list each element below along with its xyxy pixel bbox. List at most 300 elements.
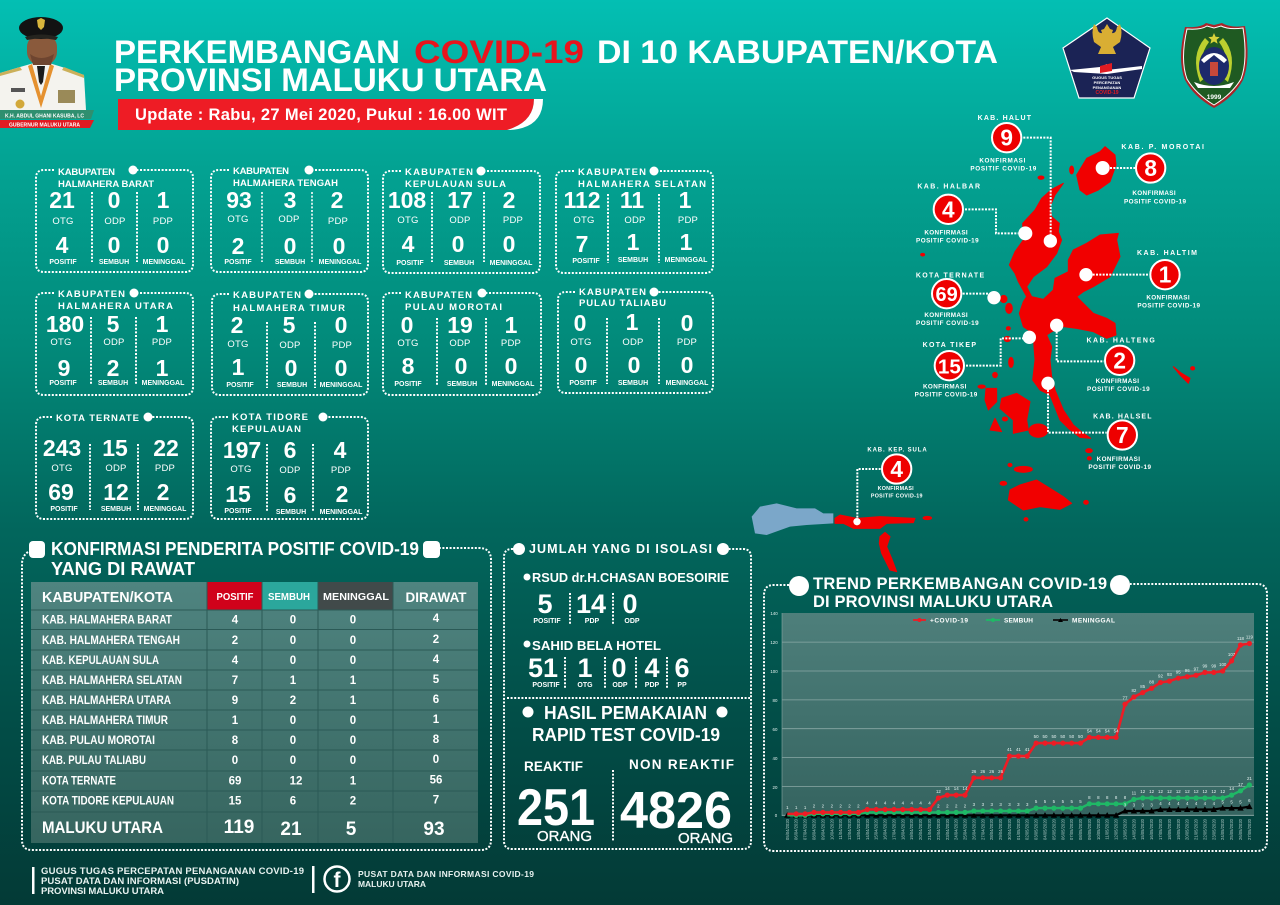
x axis dates: 03/05/2020 xyxy=(1034,818,1039,840)
callout: kab. halteng xyxy=(1050,319,1155,393)
callout: kota ternate: KOTA TERNATE xyxy=(916,273,984,280)
callout: kab. halut: 9 xyxy=(1000,125,1013,151)
table: SEMBUH xyxy=(268,591,310,603)
table: 5 xyxy=(433,674,440,686)
x axis dates: 15/04/2020 xyxy=(874,818,879,840)
x axis dates: 15/05/2020 xyxy=(1140,818,1145,840)
table: 9 xyxy=(232,695,238,707)
x axis dates: 23/05/2020 xyxy=(1211,818,1216,840)
data labels: positif: 77 xyxy=(1123,696,1128,700)
data labels: sembuh: 2 xyxy=(955,804,958,808)
logo: gugus tugas xyxy=(1063,18,1150,98)
heading: hasil rapid test: RAPID TEST COVID-19 xyxy=(532,725,720,745)
x axis dates: 14/04/2020 xyxy=(865,818,870,840)
x axis dates: 17/04/2020 xyxy=(892,818,896,840)
y axis labels: 60 xyxy=(773,727,778,732)
x axis dates: 20/05/2020 xyxy=(1185,818,1190,840)
data labels: sembuh: 5 xyxy=(1062,799,1065,804)
data labels: meninggal: 4 xyxy=(1168,801,1171,806)
panel: halmahera barat: ODP xyxy=(104,216,126,227)
panel: halmahera barat: 0 xyxy=(157,232,169,258)
stats: sahid bela hotel: 51 xyxy=(528,653,558,683)
data labels: positif: 26 xyxy=(998,769,1004,774)
table: 2 xyxy=(290,695,296,707)
panel: halmahera barat: 4 xyxy=(56,232,69,258)
callout: kab. p. morotai xyxy=(1096,144,1204,205)
x axis dates: 12/05/2020 xyxy=(1114,818,1119,840)
data labels: positif: 26 xyxy=(980,769,986,774)
stats: rsud chasan boesoirie: 14 xyxy=(576,589,606,619)
data labels: positif: 50 xyxy=(1069,734,1075,739)
table: 21 xyxy=(280,819,302,840)
callout: kab. p. morotai: POSITIF COVID-19 xyxy=(1124,198,1186,205)
data labels: positif: 4 xyxy=(919,800,922,806)
data labels: sembuh xyxy=(937,776,1252,808)
panel: konfirmasi penderita positif xyxy=(22,538,491,850)
stats: sahid bela hotel: PDP xyxy=(645,682,660,689)
panel: pulau morotai: PDP xyxy=(501,338,521,349)
table: KAB. HALMAHERA BARAT xyxy=(42,614,172,626)
panel: halmahera tengah xyxy=(211,166,368,272)
footer: facebook credit: MALUKU UTARA xyxy=(358,879,426,889)
data labels: positif: 118 xyxy=(1237,636,1245,641)
callout: kota tikep: KOTA TIKEP xyxy=(923,342,976,349)
logo: provinsi maluku utara: 1999 xyxy=(1207,94,1222,101)
table: 119 xyxy=(224,817,254,838)
data labels: sembuh: 5 xyxy=(1079,799,1082,804)
panel: kota tidore kepulauan: PDP xyxy=(331,465,351,476)
data labels: meninggal: 4 xyxy=(1186,801,1189,806)
stat: reaktif: ORANG xyxy=(537,828,592,845)
x axis dates: 19/04/2020 xyxy=(909,818,914,840)
logo: gugus tugas: COVID-19 xyxy=(1095,90,1119,96)
callout: kab. haltim: KONFIRMASI xyxy=(1146,295,1190,302)
data labels: positif: 26 xyxy=(989,769,995,774)
x axis dates: 10/04/2020 xyxy=(829,818,834,840)
panel: halmahera utara: 1 xyxy=(156,355,169,381)
panel: pulau morotai: 1 xyxy=(505,312,518,338)
y axis labels: 140 xyxy=(770,611,778,616)
callout: kab. kep. sula: KONFIRMASI xyxy=(878,486,914,492)
data labels: sembuh: 2 xyxy=(946,804,949,808)
panel: halmahera tengah: OTG xyxy=(227,214,249,225)
data labels: positif: 99 xyxy=(1211,664,1217,668)
panel: kota tidore kepulauan: 4 xyxy=(334,437,347,463)
map: red islands xyxy=(835,147,1195,572)
panel: halmahera selatan: 112 xyxy=(563,187,601,213)
panel: halmahera barat xyxy=(36,166,193,272)
stats: sahid bela hotel: 1 xyxy=(577,653,593,683)
footer: gugus tugas credit: PUSAT DATA DAN INFORMASI (PUSDATIN) xyxy=(41,876,239,887)
panel: pulau taliabu: 0 xyxy=(681,310,693,336)
panel: halmahera tengah: PDP xyxy=(328,216,348,227)
legend: SEMBUH xyxy=(1004,618,1033,624)
data labels: positif: 14 xyxy=(963,786,968,791)
data labels: meninggal: 4 xyxy=(1213,801,1216,806)
panel: kota ternate: 15 xyxy=(102,435,128,461)
panel: halmahera tengah: ODP xyxy=(278,214,300,225)
x axis dates: 08/05/2020 xyxy=(1078,818,1083,840)
callout: kab. halbar: KONFIRMASI xyxy=(924,230,968,237)
x axis dates: 24/05/2020 xyxy=(1220,818,1225,840)
data labels: sembuh: 3 xyxy=(990,802,993,807)
series: positif xyxy=(787,644,1249,814)
x axis dates: 07/04/2020 xyxy=(803,818,808,840)
y axis labels: 40 xyxy=(773,756,778,761)
footer: facebook credit: f xyxy=(334,869,342,892)
x axis dates: 05/05/2020 xyxy=(1051,818,1056,840)
table: 6 xyxy=(433,694,439,706)
data labels: positif: 107 xyxy=(1228,652,1236,657)
panel: pulau morotai: 0 xyxy=(455,353,467,379)
callout: kota tikep: POSITIF COVID-19 xyxy=(915,392,978,399)
panel: halmahera utara: 9 xyxy=(58,355,70,381)
data labels: positif xyxy=(786,634,1253,810)
footer: facebook credit xyxy=(312,866,534,893)
data labels: positif: 41 xyxy=(1016,747,1021,752)
panel: kepulauan sula: PDP xyxy=(503,215,523,226)
panel: pulau taliabu: KABUPATEN xyxy=(579,287,646,298)
panel: pulau morotai xyxy=(383,288,541,395)
table: 93 xyxy=(423,819,445,840)
panel: kota tidore kepulauan: 15 xyxy=(225,481,251,507)
data labels: meninggal: 4 xyxy=(1204,801,1207,806)
stats: sahid bela hotel: PP xyxy=(677,682,687,689)
x axis dates: 16/05/2020 xyxy=(1149,818,1154,840)
data labels: positif: 54 xyxy=(1105,728,1110,734)
title xyxy=(114,34,998,98)
data labels: positif: 4 xyxy=(884,800,887,806)
panel: kota tidore kepulauan: KEPULAUAN xyxy=(232,424,301,435)
data labels: sembuh: 2 xyxy=(937,804,940,808)
data labels: positif: 41 xyxy=(1025,747,1030,752)
data labels: positif: 4 xyxy=(910,800,913,806)
x axis dates: 29/04/2020 xyxy=(998,818,1003,840)
stats: sahid bela hotel: 4 xyxy=(644,653,660,683)
panel: kota ternate xyxy=(36,412,193,519)
callout: kab. p. morotai: 8 xyxy=(1144,155,1157,181)
callout: kota tikep: KONFIRMASI xyxy=(923,384,967,391)
stats: sahid bela hotel: 6 xyxy=(674,653,690,683)
panel: kepulauan sula: 2 xyxy=(503,187,515,213)
stats: rsud chasan boesoirie: ODP xyxy=(624,618,640,625)
data labels: positif: 50 xyxy=(1051,734,1057,739)
panel: halmahera selatan: 11 xyxy=(620,187,644,213)
data labels: positif: 54 xyxy=(1087,728,1092,734)
data labels: positif: 50 xyxy=(1034,734,1039,739)
logo: provinsi maluku utara xyxy=(1181,23,1248,108)
callout: kab. kep. sula: 4 xyxy=(890,456,903,482)
y axis labels: 100 xyxy=(770,669,778,674)
callout: kab. halteng: 2 xyxy=(1113,347,1126,373)
panel: halmahera utara: 5 xyxy=(107,311,120,337)
data labels: positif: 54 xyxy=(1096,728,1101,734)
panel: halmahera utara: MENINGGAL xyxy=(142,380,185,387)
stats: rsud chasan boesoirie: POSITIF xyxy=(533,618,561,625)
x axis dates: 14/05/2020 xyxy=(1131,818,1136,840)
panel: halmahera timur: SEMBUH xyxy=(277,382,307,389)
panel: halmahera barat: 21 xyxy=(49,187,75,213)
panel: pulau taliabu xyxy=(558,287,713,393)
data labels: meninggal: 6 xyxy=(1248,798,1251,803)
data labels: meninggal: 4 xyxy=(1177,801,1180,806)
callout: kab. halut: KAB. HALUT xyxy=(978,115,1032,122)
panel: kota tidore kepulauan: 6 xyxy=(284,482,296,508)
stat: non reaktif: NON REAKTIF xyxy=(629,757,734,772)
panel: pulau taliabu: 1 xyxy=(626,309,639,335)
data labels: positif: 50 xyxy=(1043,734,1048,739)
callout: kab. halsel: 7 xyxy=(1116,422,1129,448)
data labels: meninggal xyxy=(1124,798,1251,808)
panel: pulau taliabu: SEMBUH xyxy=(618,380,648,387)
data labels: sembuh: 3 xyxy=(1017,802,1020,807)
panel: halmahera tengah: MENINGGAL xyxy=(319,259,362,266)
data labels: positif: 99 xyxy=(1202,664,1208,668)
footer: facebook credit: PUSAT DATA DAN INFORMASI COVID-19 xyxy=(358,869,534,879)
x axis dates: 11/04/2020 xyxy=(838,818,843,840)
table: 0 xyxy=(290,655,296,667)
callout: kota ternate: POSITIF COVID-19 xyxy=(916,320,979,327)
x axis dates: 01/05/2020 xyxy=(1016,818,1021,840)
table: 8 xyxy=(232,735,239,747)
panel: kepulauan sula: POSITIF xyxy=(396,260,424,267)
panel: pulau taliabu: 0 xyxy=(628,352,640,378)
panel: kota ternate: 2 xyxy=(157,479,169,505)
table: MALUKU UTARA xyxy=(42,819,163,837)
table: 4 xyxy=(433,654,440,666)
data labels: positif: 95 xyxy=(1176,670,1181,674)
callout: kab. halut xyxy=(970,115,1057,248)
data labels: positif: 2 xyxy=(831,804,834,808)
panel: kepulauan sula: 0 xyxy=(452,231,464,257)
logo: gugus tugas: PERCEPATAN xyxy=(1094,80,1120,85)
data labels: positif: 2 xyxy=(822,804,825,808)
panel: halmahera tengah: POSITIF xyxy=(224,259,252,266)
table: 0 xyxy=(350,614,356,626)
stats: sahid bela hotel: 0 xyxy=(611,653,627,683)
y axis labels: 120 xyxy=(770,640,778,645)
panel: halmahera utara: POSITIF xyxy=(49,380,77,387)
logo: gugus tugas: GUGUS TUGAS xyxy=(1092,75,1122,80)
panel: kepulauan sula: ODP xyxy=(449,215,471,226)
stats: rsud chasan boesoirie: RSUD dr.H.CHASAN BOESOIRIE xyxy=(532,571,729,585)
stat: reaktif: REAKTIF xyxy=(524,759,583,774)
x axis dates: 17/05/2020 xyxy=(1158,818,1163,840)
table: DIRAWAT xyxy=(406,589,467,605)
panel: halmahera selatan: 7 xyxy=(576,231,588,257)
table: KAB. PULAU TALIABU xyxy=(42,755,146,767)
table heading: KONFIRMASI PENDERITA POSITIF COVID-19 xyxy=(51,538,419,559)
panel: kota ternate: PDP xyxy=(155,463,175,474)
table: 8 xyxy=(433,734,440,746)
table: 0 xyxy=(290,755,296,767)
x axis dates: 04/05/2020 xyxy=(1042,818,1048,840)
data labels: meninggal: 5 xyxy=(1239,800,1242,804)
panel: halmahera selatan: MENINGGAL xyxy=(665,257,708,264)
data labels: positif: 4 xyxy=(875,800,878,806)
data labels: meninggal: 4 xyxy=(1159,801,1162,806)
callout: kab. halteng: KAB. HALTENG xyxy=(1086,337,1155,344)
panel: halmahera barat: MENINGGAL xyxy=(143,259,186,266)
x axis dates: 21/05/2020 xyxy=(1194,818,1199,840)
x axis dates xyxy=(785,818,1252,840)
map: maluku utara xyxy=(752,115,1204,572)
data labels: sembuh: 3 xyxy=(982,802,985,807)
table: 4 xyxy=(433,613,440,625)
table: 0 xyxy=(290,735,296,747)
table: 7 xyxy=(433,794,439,806)
callout: kota ternate xyxy=(916,273,1001,327)
table: KOTA TIDORE KEPULAUAN xyxy=(42,796,174,808)
callout: kota tikep: 15 xyxy=(938,355,961,378)
panel: kota ternate: 69 xyxy=(48,479,74,505)
data labels: positif: 14 xyxy=(945,786,950,791)
x axis dates: 20/04/2020 xyxy=(918,818,923,840)
panel: halmahera timur: KABUPATEN xyxy=(233,290,301,301)
y axis labels xyxy=(770,611,778,818)
panel: halmahera barat: PDP xyxy=(153,216,173,227)
table heading: YANG DI RAWAT xyxy=(51,558,196,579)
table: 6 xyxy=(290,796,296,808)
panel: pulau morotai: 8 xyxy=(402,353,415,379)
data labels: positif: 97 xyxy=(1194,666,1199,672)
data labels: sembuh: 3 xyxy=(973,802,976,807)
table xyxy=(31,582,478,843)
panel: halmahera timur: ODP xyxy=(279,340,301,351)
callout: kab. halteng: KONFIRMASI xyxy=(1096,378,1139,385)
line chart xyxy=(770,611,1254,840)
panel: halmahera utara: 2 xyxy=(107,355,119,381)
callout: kab. halsel: KAB. HALSEL xyxy=(1093,413,1152,420)
data labels: sembuh: 3 xyxy=(1008,802,1011,807)
panel: halmahera barat: POSITIF xyxy=(49,259,77,266)
panel: trend perkembangan xyxy=(764,575,1267,851)
panel: pulau morotai: MENINGGAL xyxy=(492,381,535,388)
x axis dates: 18/04/2020 xyxy=(900,818,905,840)
panel: kepulauan sula: 4 xyxy=(402,231,415,257)
title: COVID-19 xyxy=(414,34,584,70)
callout: kab. haltim: POSITIF COVID-19 xyxy=(1137,303,1200,310)
table: 69 xyxy=(229,776,241,788)
panel: halmahera tengah: 2 xyxy=(331,187,343,213)
panel: halmahera tengah: 93 xyxy=(226,187,252,213)
callout: kab. halbar xyxy=(916,184,1032,245)
panel: kota ternate: SEMBUH xyxy=(101,506,131,513)
table: 1 xyxy=(290,675,297,687)
data labels: positif: 1 xyxy=(795,805,798,810)
panel: kepulauan sula: 17 xyxy=(447,187,473,213)
data labels: sembuh: 12 xyxy=(1176,789,1181,794)
callout: kab. halut: POSITIF COVID-19 xyxy=(970,166,1037,173)
panel: halmahera timur: 5 xyxy=(283,312,296,338)
panel: kepulauan sula: KEPULAUAN SULA xyxy=(405,179,506,190)
panel: kota ternate: OTG xyxy=(51,463,73,474)
x axis dates: 22/05/2020 xyxy=(1202,818,1207,840)
data labels: sembuh: 8 xyxy=(1106,795,1109,800)
panel: halmahera tengah: SEMBUH xyxy=(275,259,305,266)
y axis labels: 20 xyxy=(773,785,778,790)
x axis dates: 09/04/2020 xyxy=(820,818,825,840)
panel: kota ternate: KOTA TERNATE xyxy=(56,413,139,424)
name plate: governor: GUBERNUR MALUKU UTARA xyxy=(9,122,80,128)
footer: gugus tugas credit: PROVINSI MALUKU UTARA xyxy=(41,886,164,897)
panel: halmahera timur: 0 xyxy=(335,355,347,381)
legend: MENINGGAL xyxy=(1072,618,1115,624)
table: 4 xyxy=(232,655,239,667)
panel: halmahera selatan: PDP xyxy=(678,215,698,226)
panel: pulau morotai: KABUPATEN xyxy=(405,290,472,301)
data labels: positif: 93 xyxy=(1167,672,1172,677)
data labels: sembuh: 12 xyxy=(1194,789,1199,794)
table: 0 xyxy=(350,715,356,727)
data labels: positif: 2 xyxy=(813,804,816,808)
stat: reaktif: 251 xyxy=(517,779,595,837)
x axis dates: 27/05/2020 xyxy=(1247,818,1252,840)
data labels: sembuh: 8 xyxy=(1088,795,1091,800)
x axis dates: 19/05/2020 xyxy=(1176,818,1181,840)
panel: pulau morotai: SEMBUH xyxy=(447,381,477,388)
panel: halmahera timur: PDP xyxy=(332,340,352,351)
data labels: sembuh: 12 xyxy=(1202,789,1208,794)
panel: halmahera barat: 1 xyxy=(157,187,170,213)
panel: pulau taliabu: POSITIF xyxy=(569,380,597,387)
callout: kota ternate: KONFIRMASI xyxy=(924,312,968,319)
data labels: positif: 50 xyxy=(1078,734,1083,739)
panel: halmahera selatan: 1 xyxy=(627,229,640,255)
title: DI 10 KABUPATEN/KOTA xyxy=(597,34,998,70)
data labels: sembuh: 12 xyxy=(1220,789,1226,794)
x axis dates: 30/04/2020 xyxy=(1007,818,1012,840)
panel: kota ternate: MENINGGAL xyxy=(144,506,187,513)
callout: kab. halbar: KAB. HALBAR xyxy=(917,184,980,191)
x axis dates: 25/04/2020 xyxy=(962,818,968,840)
data labels: positif: 50 xyxy=(1060,734,1066,739)
data labels: sembuh: 5 xyxy=(1044,799,1047,804)
y axis labels: 0 xyxy=(775,813,778,818)
table: MENINGGAL xyxy=(323,591,390,603)
table: 4 xyxy=(232,614,239,626)
panel: halmahera timur: 2 xyxy=(231,312,243,338)
table: 2 xyxy=(433,634,439,646)
panel: halmahera tengah: 2 xyxy=(232,233,244,259)
table: 0 xyxy=(350,655,356,667)
x axis dates: 13/05/2020 xyxy=(1122,818,1128,840)
callout: kab. haltim: KAB. HALTIM xyxy=(1137,250,1197,257)
x axis dates: 11/05/2020 xyxy=(1105,818,1110,840)
callout: kab. halut: KONFIRMASI xyxy=(979,158,1026,165)
data labels: sembuh: 12 xyxy=(1185,789,1190,794)
panel: pulau taliabu: 0 xyxy=(575,352,587,378)
panel: kepulauan sula: 108 xyxy=(388,187,426,213)
stat: non reaktif: ORANG xyxy=(678,830,733,847)
x axis dates: 26/04/2020 xyxy=(971,818,976,840)
data labels: sembuh: 12 xyxy=(1167,789,1172,794)
panel: halmahera barat: KABUPATEN xyxy=(58,167,115,178)
data labels: sembuh: 5 xyxy=(1035,799,1038,804)
panel: kota tidore kepulauan: KOTA TIDORE xyxy=(232,412,308,423)
x axis dates: 24/04/2020 xyxy=(954,818,959,840)
title: PERKEMBANGAN xyxy=(114,34,400,70)
callout: kota tikep xyxy=(915,331,1036,399)
name plate: governor: K.H. ABDUL GHANI KASUBA, LC xyxy=(5,114,85,120)
panel: kota tidore kepulauan xyxy=(211,412,368,519)
stat: reaktif xyxy=(517,759,595,845)
panel: kota tidore kepulauan: 2 xyxy=(336,481,348,507)
table: 0 xyxy=(232,755,238,767)
data labels: positif: 85 xyxy=(1140,684,1146,689)
x axis dates: 25/05/2020 xyxy=(1229,818,1234,840)
stats: rsud chasan boesoirie: 0 xyxy=(622,589,638,619)
